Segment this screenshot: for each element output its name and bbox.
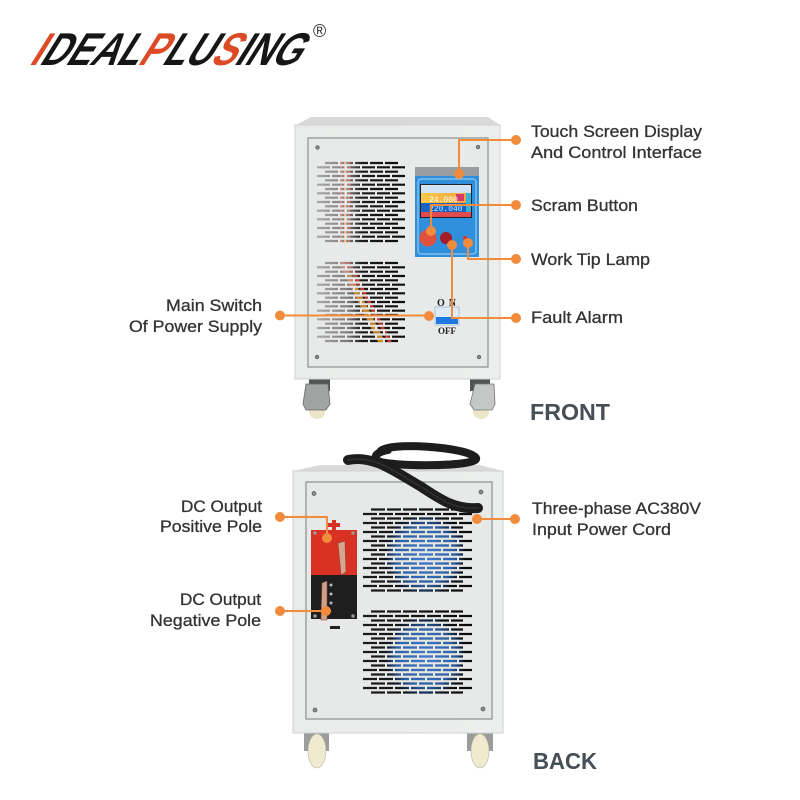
blue fan glow <box>383 513 467 699</box>
cabinet body <box>295 125 500 379</box>
logo: IDEALPLUSING <box>22 23 323 75</box>
callout: main switch: Of Power Supply <box>129 317 263 336</box>
power cable <box>348 446 478 508</box>
upper vent <box>317 163 406 241</box>
front casters <box>303 379 495 419</box>
callout: main switch <box>129 296 434 336</box>
fault alarm button <box>440 232 452 244</box>
power switch: O N <box>437 298 457 309</box>
touch screen: 220.040 <box>429 205 463 214</box>
callout: scram button <box>426 196 638 236</box>
scram button <box>420 230 436 246</box>
power switch: OFF <box>438 326 456 336</box>
plus sign <box>328 520 340 530</box>
touch screen <box>420 184 472 218</box>
callout: DC output positive pole: DC Output <box>181 497 262 516</box>
callout: touch screen display <box>454 122 703 179</box>
callout: DC output positive pole <box>160 497 332 543</box>
minus sign <box>330 626 340 629</box>
callout: three-phase input power cord <box>472 499 702 539</box>
heading: front: FRONT <box>530 399 610 425</box>
back screws <box>312 490 485 712</box>
callout: three-phase input power cord: Three-phase AC380V <box>532 499 702 518</box>
back inner panel <box>306 482 492 719</box>
callout: three-phase input power cord: Input Power Cord <box>532 520 671 539</box>
work tip lamp <box>463 236 467 240</box>
fan vent lower <box>363 612 472 692</box>
screws <box>315 145 481 359</box>
callout: main switch: Main Switch <box>166 296 262 315</box>
heading: back: BACK <box>533 748 597 774</box>
touch screen: 24.000 <box>429 196 458 205</box>
lower vent <box>317 263 406 341</box>
panel: back view of cabinet <box>293 446 503 768</box>
callout: DC output negative pole: Negative Pole <box>150 611 261 630</box>
cabinet top lid <box>296 117 500 125</box>
callout: touch screen display: And Control Interface <box>531 143 702 162</box>
logo: ® <box>313 21 326 41</box>
panel: front view of cabinet <box>295 117 500 419</box>
callout: touch screen display: Touch Screen Display <box>531 122 703 141</box>
back cabinet lid <box>293 465 503 471</box>
callout: work tip lamp <box>463 238 650 269</box>
back casters <box>304 733 493 768</box>
back cabinet body <box>293 471 503 733</box>
callout: DC output positive pole: Positive Pole <box>160 517 262 536</box>
callout: work tip lamp: Work Tip Lamp <box>531 250 650 269</box>
power switch <box>435 298 459 336</box>
callout: fault alarm <box>447 240 623 327</box>
fan vent upper <box>363 510 472 590</box>
control box <box>415 167 479 257</box>
callout: DC output negative pole <box>150 590 331 630</box>
wires seen through vents <box>338 162 392 342</box>
callout: DC output negative pole: DC Output <box>180 590 261 609</box>
inner door panel <box>308 138 488 367</box>
red positive terminal <box>311 530 357 576</box>
callout: scram button: Scram Button <box>531 196 638 215</box>
callout: fault alarm: Fault Alarm <box>531 308 623 327</box>
black negative terminal <box>311 575 357 620</box>
